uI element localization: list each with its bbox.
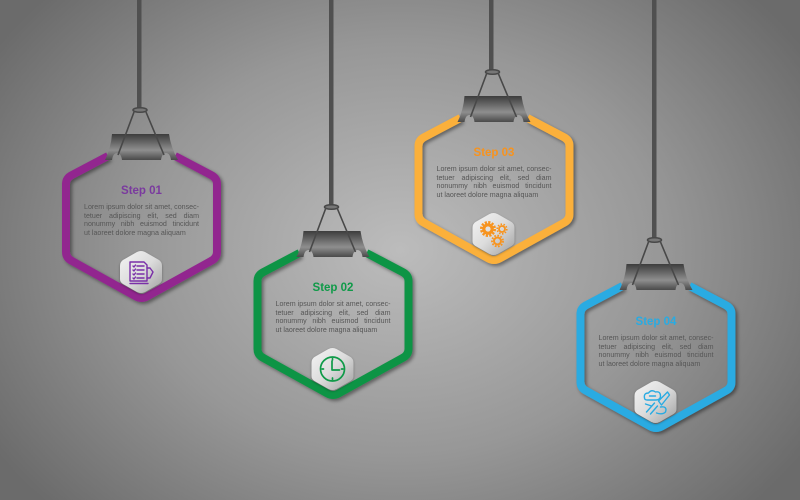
body text: nonummy nibh euismod tincidunt <box>436 182 552 190</box>
hanging wire <box>137 0 142 110</box>
body text <box>276 300 392 337</box>
icon badge <box>120 251 162 293</box>
icon badge <box>634 381 676 423</box>
body text <box>436 165 552 202</box>
body text: ut laoreet dolore magna aliquam <box>276 326 377 334</box>
hexagon frame <box>418 118 570 260</box>
body text <box>84 203 200 240</box>
hexagon frame <box>258 253 408 395</box>
binder clip <box>105 108 178 160</box>
body text <box>598 334 714 371</box>
body text: ut laoreet dolore magna aliquam <box>598 360 700 368</box>
icon: checklist <box>130 262 153 284</box>
icon: rocket and cloud <box>644 391 670 414</box>
body text: nonummy nibh euismod tincidunt <box>598 351 714 359</box>
body text: nonummy nibh euismod tincidunt <box>84 220 199 228</box>
step title: Step 01 <box>121 185 163 197</box>
icon badge <box>472 213 514 255</box>
step title: Step 02 <box>313 282 353 294</box>
body text: Lorem ipsum dolor sit amet, consec- <box>84 203 199 211</box>
body text: tetuer adipiscing elit, sed diam <box>436 174 552 182</box>
hanging wire <box>489 0 494 72</box>
hexagon frame <box>580 286 732 428</box>
panel: step 3 <box>418 0 570 260</box>
body text: Lorem ipsum dolor sit amet, consec- <box>436 165 552 173</box>
body text: Lorem ipsum dolor sit amet, consec- <box>598 334 714 342</box>
body text: tetuer adipiscing elit, sed diam <box>84 212 199 220</box>
icon: gears <box>481 222 507 246</box>
binder clip <box>620 238 692 290</box>
panel: step 4 <box>580 0 732 428</box>
icon badge <box>312 348 354 390</box>
panel: step 2 <box>258 0 408 395</box>
step title: Step 04 <box>636 316 677 328</box>
binder clip <box>296 205 370 257</box>
body text: Lorem ipsum dolor sit amet, consec- <box>276 300 390 308</box>
hanging wire <box>329 0 334 207</box>
panel: step 1 <box>66 0 217 298</box>
body text: nonummy nibh euismod tincidunt <box>276 317 390 325</box>
icon: clock <box>320 357 344 381</box>
step title: Step 03 <box>474 147 514 159</box>
body text: ut laoreet dolore magna aliquam <box>436 191 538 199</box>
binder clip <box>458 70 530 122</box>
body text: ut laoreet dolore magna aliquam <box>84 229 186 237</box>
hanging wire <box>652 0 656 240</box>
body text: tetuer adipiscing elit, sed diam <box>276 309 390 317</box>
hexagon frame <box>66 156 217 298</box>
body text: tetuer adipiscing elit, sed diam <box>598 343 714 351</box>
